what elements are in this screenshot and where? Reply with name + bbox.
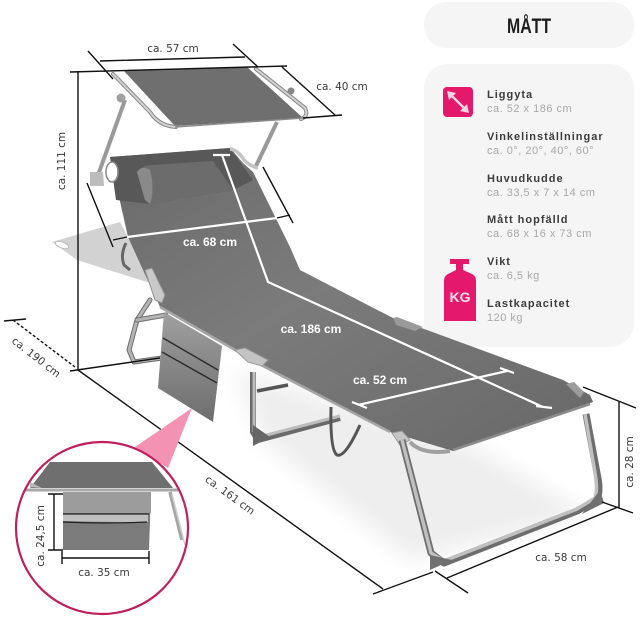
panel: measurements [424, 64, 634, 347]
tube end [106, 162, 118, 182]
dimension: 58 cm [435, 507, 618, 593]
spec: Liggyta: Liggyta [487, 89, 533, 101]
heading: MÅTT: MÅTT [507, 14, 551, 38]
dimension: 52 cm [352, 368, 514, 408]
dimension: 35 cm [62, 551, 149, 579]
dimension: 57 cm: ca. 57 cm [147, 43, 199, 55]
spec: Vinkelinställningar: ca. 0°, 20°, 40°, 60° [487, 145, 594, 157]
spec: Lastkapacitet: 120 kg [487, 312, 523, 324]
spec: Huvudkudde: Huvudkudde [487, 173, 564, 185]
dimension: 190 cm [4, 319, 75, 380]
dimension: 111 cm: ca. 111 cm [56, 132, 68, 190]
front leg [402, 414, 604, 570]
flat backrest ghost [52, 222, 150, 283]
dimension: 52 cm: ca. 52 cm [353, 373, 407, 387]
hinges and handles [145, 268, 584, 445]
middle leg [253, 372, 340, 446]
dimension: 24,5 cm: ca. 24,5 cm [35, 505, 47, 567]
canopy struts [90, 88, 294, 186]
icon: KG weight [444, 259, 476, 321]
dimension: 28 cm: ca. 28 cm [624, 436, 636, 488]
spec: Vikt: ca. 6,5 kg [487, 270, 540, 282]
dimension: 40 cm: ca. 40 cm [316, 81, 368, 93]
strap [331, 407, 360, 455]
spec: Liggyta [487, 89, 572, 115]
zoom connector [135, 408, 192, 468]
dimension: 68 cm: ca. 68 cm [183, 235, 237, 249]
dimension: 186 cm [213, 155, 552, 408]
dimension: 190 cm: ca. 190 cm [9, 335, 62, 380]
spec: Mått hopfälld: ca. 68 x 16 x 73 cm [487, 228, 592, 240]
pillow [137, 161, 233, 204]
spec: Vikt: Vikt [487, 256, 511, 268]
sun lounger [52, 67, 604, 570]
spec: Liggyta: ca. 52 x 186 cm [487, 103, 572, 115]
canopy [113, 67, 306, 127]
spec: Lastkapacitet: Lastkapacitet [487, 298, 570, 310]
detail leg [170, 492, 182, 540]
title pill [424, 2, 634, 48]
dimension: 161 cm: ca. 161 cm [203, 474, 257, 518]
spec: Lastkapacitet [487, 298, 570, 324]
spec: Vinkelinställningar [487, 131, 604, 157]
spec: Mått hopfälld: Mått hopfälld [487, 214, 568, 226]
spec: Huvudkudde [487, 173, 595, 199]
detail bed [30, 462, 173, 488]
dimension: 161 cm [78, 370, 433, 594]
spec: Huvudkudde: ca. 33,5 x 7 x 14 cm [487, 187, 595, 199]
dimension: 57 cm [70, 43, 287, 79]
dimension: 186 cm: ca. 186 cm [281, 322, 341, 336]
spec: Vinkelinställningar: Vinkelinställningar [487, 131, 604, 143]
callout: pocket detail [16, 442, 188, 614]
floor shadow [235, 370, 590, 560]
bed fabric [110, 148, 593, 451]
icon: diagonal size arrows [443, 87, 473, 117]
detail pocket [63, 513, 150, 550]
side pocket [158, 312, 222, 422]
icon: KG weight: KG [450, 289, 471, 305]
backrest shading [110, 148, 253, 204]
dimension: 40 cm [282, 67, 368, 118]
spec: Mått hopfälld [487, 214, 592, 240]
dimension: 24,5 cm [35, 494, 63, 567]
spec: Vikt [487, 256, 540, 282]
dimension: 68 cm [87, 167, 293, 249]
floor line [70, 358, 160, 371]
frame edge [160, 149, 590, 450]
dimension: 28 cm [583, 387, 636, 513]
dimension: 35 cm: ca. 35 cm [78, 567, 130, 579]
side strap [122, 243, 130, 270]
dimension: 58 cm: ca. 58 cm [535, 552, 587, 564]
rear left leg [129, 300, 166, 362]
